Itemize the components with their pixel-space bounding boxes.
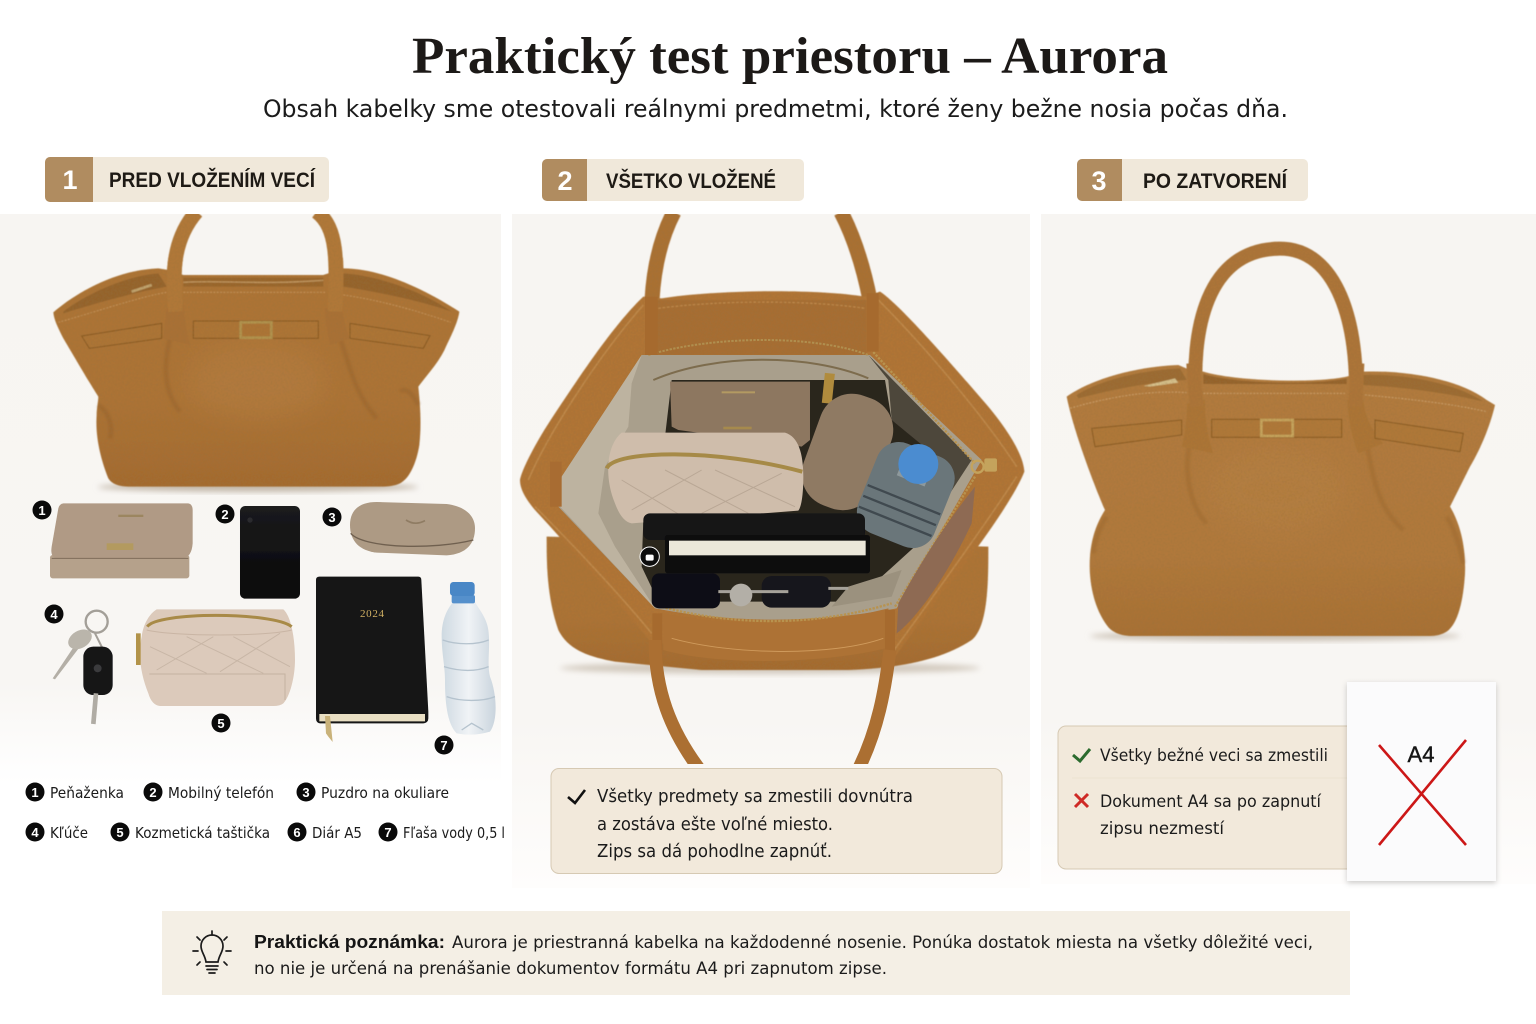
item number badges: 5 [217,716,225,731]
callout: all items fit: Zips sa dá pohodlne zapnúť. [597,841,832,862]
glasses case inside [802,394,894,510]
legend: Fľaša vody 0,5 l [403,824,505,842]
step header 3: PO ZATVORENÍ [1143,170,1288,193]
legend: Kľúče [50,824,88,842]
legend: 4 [31,825,39,840]
item number badges: 2 [221,507,229,522]
open bag photo [53,212,459,492]
dark interior [642,380,948,602]
item number badges: 1 [38,503,46,518]
callout: result summary: zipsu nezmestí [1100,819,1225,839]
item: phone [240,506,300,599]
panel: after closing [1041,214,1536,884]
item: diary 2024 [316,577,428,742]
legend: Diár A5 [312,824,362,842]
legend: Kozmetická taštička [135,824,270,842]
callout: all items fit: a zostáva ešte voľné miesto. [597,814,833,835]
zip pull [822,373,835,404]
step header 1: 1 [62,165,78,195]
item: wallet [50,503,193,578]
callout: result summary: Všetky bežné veci sa zmestili [1100,746,1328,766]
callout: result summary [1058,726,1368,869]
legend: 5 [116,825,124,840]
item: keys [53,611,113,724]
legend: 1 [31,785,39,800]
fabric lining [558,355,982,620]
item: glasses case [350,502,475,555]
legend: 6 [293,825,301,840]
item: water bottle [442,582,496,735]
title: Praktický test priestoru – Aurora [412,28,1168,85]
legend: 7 [384,825,392,840]
panel: everything packed [512,212,1030,888]
step header 1 [45,157,329,202]
callout: all items fit [551,768,1002,874]
front band [663,608,892,661]
practical note bar: Aurora je priestranná kabelka na každodenné nosenie. Ponúka dostatok miesta na všetky dôležité veci, [452,933,1313,953]
icon: light bulb [193,931,231,973]
item number badges: 4 [50,607,58,622]
badge [640,547,659,566]
step header 2: VŠETKO VLOŽENÉ [606,169,776,193]
panel: before packing [0,212,505,884]
right flap [897,487,975,633]
practical note bar: no nie je určená na prenášanie dokumentov formátu A4 pri zapnutom zipse. [254,959,887,979]
practical note bar [162,911,1350,995]
diary and phone inside [643,513,865,540]
step header 1: PRED VLOŽENÍM VECÍ [109,168,316,192]
legend: Mobilný telefón [168,784,274,802]
A4 paper crossed out: A4 [1408,742,1434,767]
panel 1 items [50,502,496,742]
subtitle: Obsah kabelky sme otestovali reálnymi predmetmi, ktoré ženy bežne nosia počas dňa. [263,95,1288,123]
closed bag photo [1067,249,1495,641]
legend: 2 [149,785,157,800]
legend: Puzdro na okuliare [321,784,449,802]
item: cosmetic pouch [136,609,295,706]
step header 3 [1077,159,1308,201]
pouch inside [608,433,803,523]
A4 paper crossed out [1347,682,1496,881]
wallet inside [670,382,810,447]
bottle inside [856,442,955,548]
legend: Peňaženka [50,784,124,802]
callout: all items fit: Všetky predmety sa zmestili dovnútra [597,786,913,807]
legend [26,782,505,842]
item number badges [32,500,454,754]
item number badges: 3 [328,510,336,525]
keys inside [652,573,720,608]
zipper ring [972,461,984,473]
step header 2: 2 [557,166,573,196]
callout: result summary: Dokument A4 sa po zapnutí [1100,792,1322,812]
packed bag photo [520,212,1024,770]
step header 3: 3 [1091,166,1107,196]
item: diary 2024: 2024 [360,608,385,620]
step header 2 [542,159,804,201]
practical note bar: Praktická poznámka: [254,932,445,952]
item number badges: 7 [440,738,448,753]
legend: 3 [302,785,310,800]
